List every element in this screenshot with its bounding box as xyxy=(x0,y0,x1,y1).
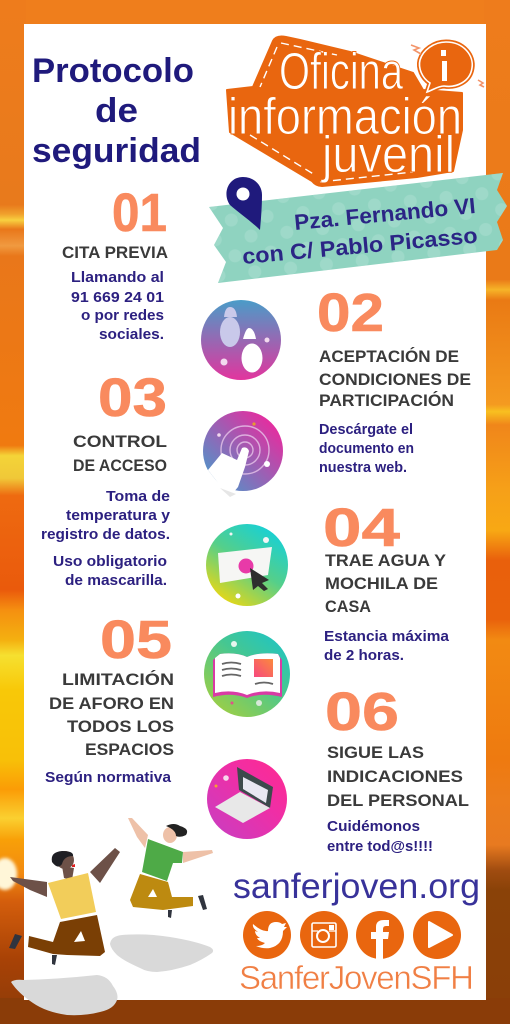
logo: Oficina información juvenil: juvenil xyxy=(320,126,455,184)
step 05: 05 xyxy=(100,610,172,670)
step 04: MOCHILA DE xyxy=(325,574,438,593)
step 02: documento en xyxy=(319,441,414,457)
step 04: Estancia máxima xyxy=(324,629,450,645)
step 01: o por redes xyxy=(81,308,164,324)
step 05: DE AFORO EN xyxy=(49,694,174,713)
step 04: de 2 horas. xyxy=(324,648,404,664)
logo: Oficina información juvenil xyxy=(227,36,484,186)
step 02: CONDICIONES DE xyxy=(319,370,471,389)
step 06: entre tod@s!!!! xyxy=(327,839,433,855)
step 02: Descárgate el xyxy=(319,422,413,438)
step 03: Toma de xyxy=(106,489,170,505)
title: seguridad xyxy=(32,132,201,170)
step 05: Según normativa xyxy=(45,770,172,786)
step 01: Llamando al xyxy=(71,270,164,286)
step 06: 06 xyxy=(325,682,399,742)
icon: facebook xyxy=(356,911,404,959)
icon: browser window with cursor xyxy=(206,524,288,606)
address ribbon xyxy=(209,173,507,283)
title: de xyxy=(95,92,138,130)
step 02: 02 xyxy=(317,283,384,343)
logo: Oficina información juvenil: información xyxy=(228,88,462,146)
step 03: de mascarilla. xyxy=(65,573,167,589)
step 02: nuestra web. xyxy=(319,460,407,476)
step 06: SIGUE LAS xyxy=(327,743,424,762)
step 04: 04 xyxy=(323,498,400,558)
grey stone right xyxy=(110,934,213,972)
title xyxy=(32,52,201,170)
step 03: DE ACCESO xyxy=(73,456,167,475)
step 01: sociales. xyxy=(99,327,164,343)
logo: Oficina información juvenil: Oficina xyxy=(279,43,403,101)
address text: con C/ Pablo Picasso xyxy=(241,223,478,269)
step 05 xyxy=(45,610,174,786)
step 03: temperatura y xyxy=(66,508,170,524)
icon: open book xyxy=(204,631,290,717)
step 06 xyxy=(325,682,469,855)
step 05: LIMITACIÓN xyxy=(62,670,174,689)
address text xyxy=(241,193,478,269)
person in green shirt xyxy=(128,818,213,918)
step 01 xyxy=(62,183,168,343)
step 02: ACEPTACIÓN DE xyxy=(319,347,459,366)
step 03: 03 xyxy=(98,368,167,428)
step 02 xyxy=(317,283,471,476)
social handle: SanferJovenSFH xyxy=(239,959,474,996)
step 01: 91 669 24 01 xyxy=(71,290,164,306)
grey stone left xyxy=(11,975,118,1015)
step 06: Cuidémonos xyxy=(327,819,420,835)
step 02: PARTICIPACIÓN xyxy=(319,391,454,410)
address text: Pza. Fernando VI xyxy=(293,193,477,235)
title: Protocolo xyxy=(32,52,194,90)
icon: footprints xyxy=(201,300,281,380)
step 03: CONTROL xyxy=(73,432,167,451)
icon: laptop xyxy=(207,759,287,839)
step 03: Uso obligatorio xyxy=(53,554,167,570)
person in yellow shirt xyxy=(9,848,120,965)
icon: twitter xyxy=(243,911,291,959)
step 04 xyxy=(323,498,450,664)
icon: instagram xyxy=(300,911,348,959)
step 04: CASA xyxy=(325,597,371,616)
icon: location pin xyxy=(226,177,262,230)
step 05: ESPACIOS xyxy=(85,740,174,759)
icon: play xyxy=(413,911,461,959)
website: sanferjoven.org xyxy=(233,867,480,906)
illustration: jumping people xyxy=(9,818,213,1015)
icon: touch hand xyxy=(200,411,283,500)
step 04: TRAE AGUA Y xyxy=(325,551,447,570)
icon: info bubble xyxy=(411,42,484,92)
step 05: TODOS LOS xyxy=(67,717,174,736)
step 06: INDICACIONES xyxy=(327,767,463,786)
social icons xyxy=(243,911,461,959)
step 01: CITA PREVIA xyxy=(62,243,168,262)
step 03 xyxy=(41,368,170,589)
step 03: registro de datos. xyxy=(41,527,170,543)
step 06: DEL PERSONAL xyxy=(327,791,469,810)
step 01: 01 xyxy=(112,183,167,243)
